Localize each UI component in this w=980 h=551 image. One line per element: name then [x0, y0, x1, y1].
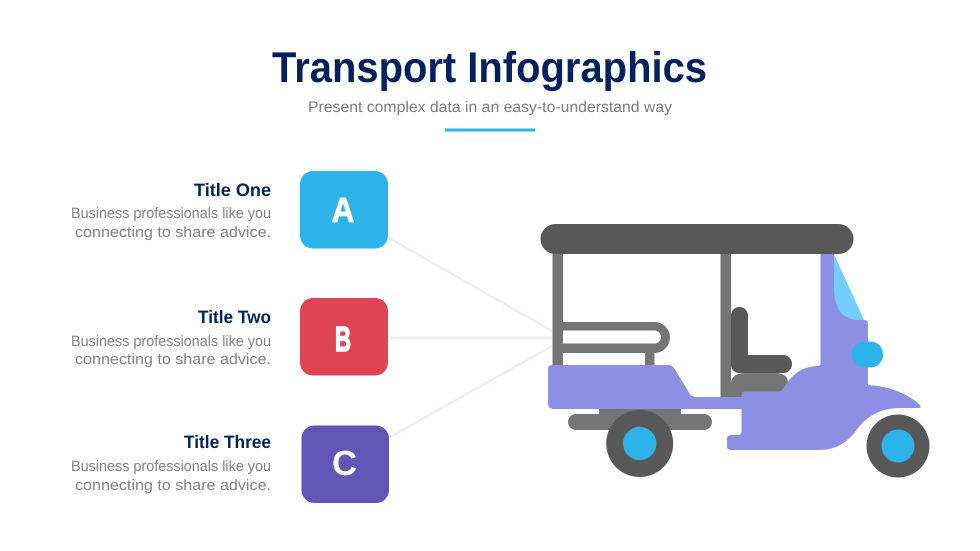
front body [727, 250, 921, 450]
rear body [548, 365, 750, 409]
text block: title one: Business professionals like you [71, 205, 271, 222]
title: Transport Infographics [272, 44, 707, 92]
subtitle: Present complex data in an easy-to-understand way [308, 99, 672, 116]
badge A [300, 171, 388, 248]
seat [731, 307, 792, 373]
badge C [302, 426, 389, 503]
title underline [445, 128, 535, 132]
badge C: C [332, 444, 357, 483]
text block: title two: Title Two [198, 307, 271, 327]
text block: title one: Title One [194, 180, 271, 200]
chassis bar [599, 405, 681, 417]
text block: title two [71, 307, 271, 368]
badge A: A [332, 191, 354, 230]
text block: title two: connecting to share advice. [75, 351, 271, 368]
middle roof post [720, 250, 731, 400]
rear roof post [552, 250, 563, 368]
front wheel [866, 414, 930, 478]
seat base [731, 373, 788, 397]
text block: title one [71, 180, 271, 241]
icon: tuk-tuk vehicle [540, 224, 930, 478]
badge B: B [335, 320, 351, 359]
text block: title three: connecting to share advice. [75, 477, 271, 494]
footboard [568, 414, 712, 430]
bench support [645, 352, 654, 366]
text block: title two: Business professionals like you [71, 333, 271, 350]
headlight [852, 342, 883, 368]
connector lines [389, 238, 552, 437]
rear wheel [606, 410, 673, 477]
text block: title three: Title Three [184, 432, 271, 452]
badge B [300, 298, 388, 376]
rear bench rail [556, 322, 670, 353]
windshield [833, 252, 864, 321]
text block: title three [71, 432, 271, 494]
roof [540, 224, 854, 254]
text block: title three: Business professionals like you [71, 458, 271, 475]
text block: title one: connecting to share advice. [75, 224, 271, 241]
